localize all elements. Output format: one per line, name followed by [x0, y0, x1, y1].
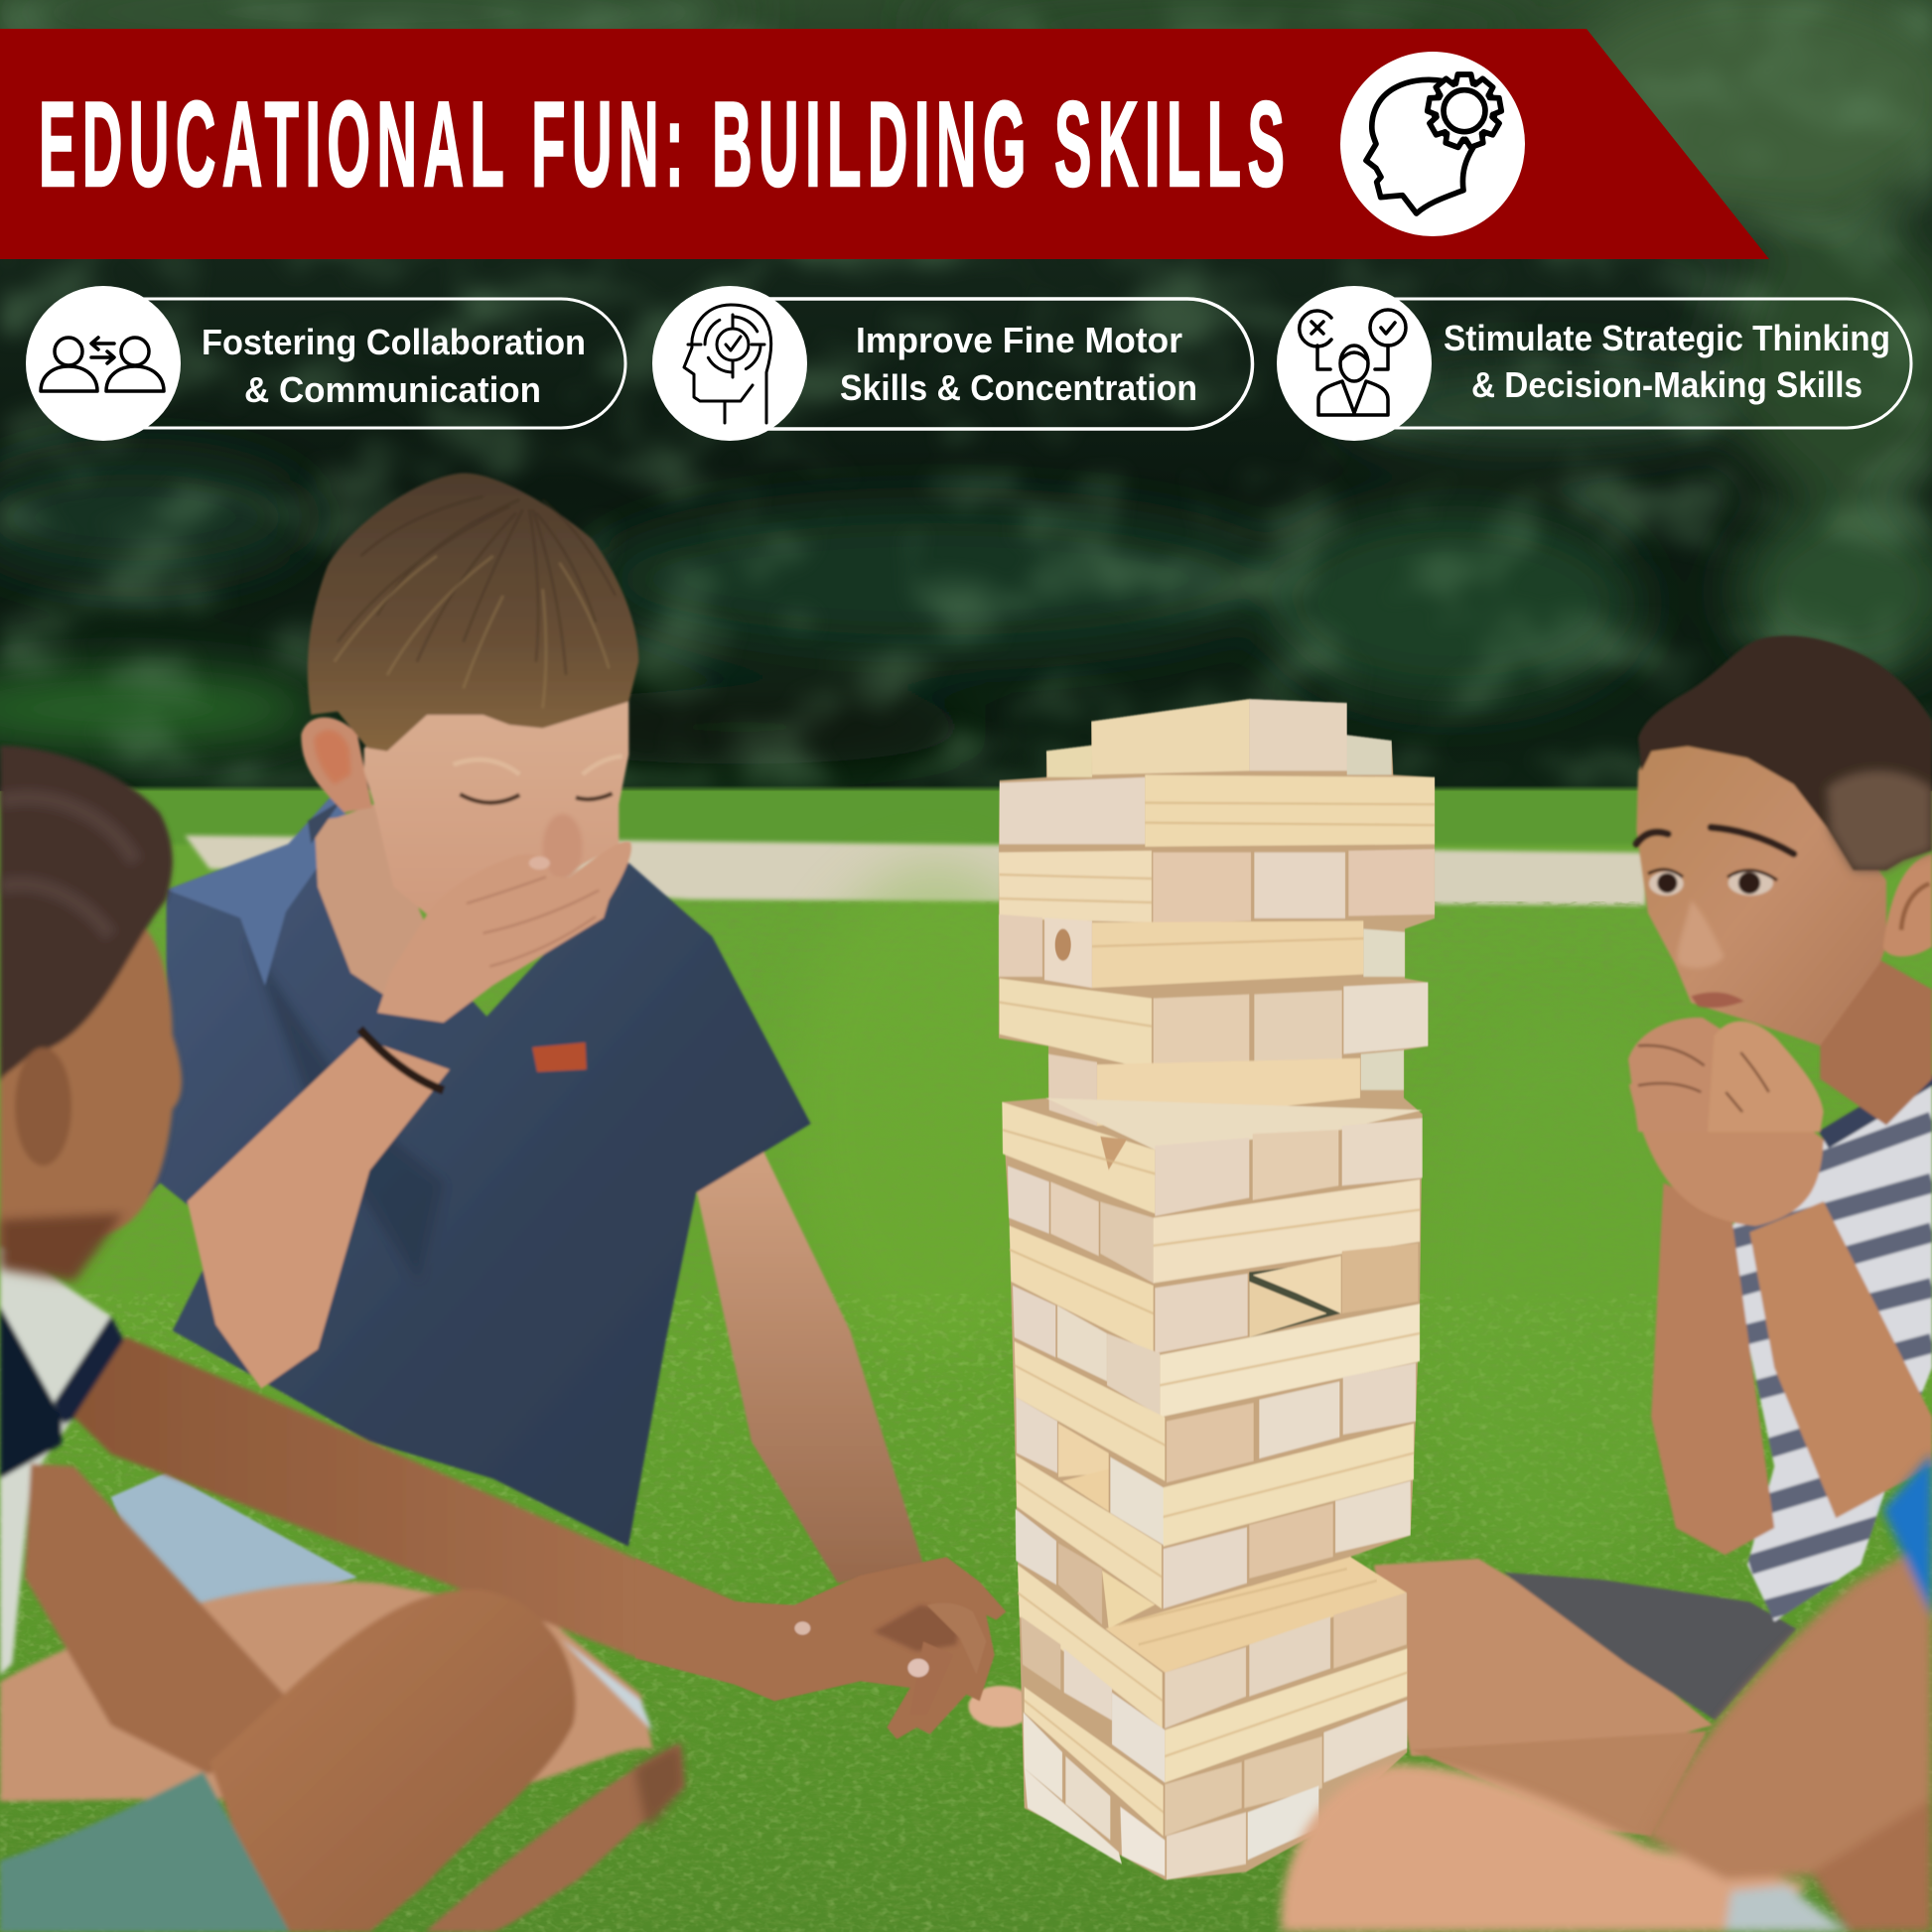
boy on the right with striped shirt — [1374, 635, 1932, 1836]
front-right child with knee and raised arm — [1281, 1453, 1932, 1932]
icon: head with target — [684, 305, 771, 423]
pill: strategic thinking — [1277, 286, 1911, 441]
reaching hand — [635, 1557, 1006, 1739]
title banner — [0, 29, 1769, 259]
tower top layer — [1046, 699, 1392, 777]
tower middle layers — [1002, 1098, 1423, 1608]
head of boy with hand over mouth — [301, 473, 638, 1023]
pill text: collaboration: & Communication — [244, 369, 541, 410]
icon: two people exchanging — [41, 338, 164, 391]
icon: head with gear — [1340, 52, 1525, 236]
boy in navy polo with hand over mouth — [111, 473, 924, 1616]
pine grain lines on long faces — [1000, 803, 1435, 1812]
pill text: fine motor: Improve Fine Motor — [856, 320, 1182, 360]
pill text: strategic thinking: & Decision-Making Skills — [1471, 364, 1863, 405]
pill: collaboration — [26, 286, 625, 441]
wooden tumbling tower — [999, 699, 1435, 1880]
background lawn and pale path — [0, 788, 1932, 1932]
pill: fine motor — [652, 286, 1253, 441]
tower upper layers — [999, 774, 1435, 1126]
banner title text: EDUCATIONAL FUN: BUILDING SKILLS — [39, 77, 1285, 212]
icon: person deciding between cross and check — [1300, 310, 1406, 415]
boy in foreground left with arm reaching — [0, 746, 763, 1932]
background trees — [0, 0, 1932, 813]
pill text: collaboration: Fostering Collaboration — [202, 322, 586, 362]
tower lower layers — [1016, 1509, 1407, 1880]
pill text: fine motor: Skills & Concentration — [840, 367, 1197, 408]
head of boy with striped shirt — [1628, 635, 1932, 1132]
pill text: strategic thinking: Stimulate Strategic Thinking — [1444, 318, 1890, 358]
bare foot behind tower — [969, 1686, 1033, 1727]
